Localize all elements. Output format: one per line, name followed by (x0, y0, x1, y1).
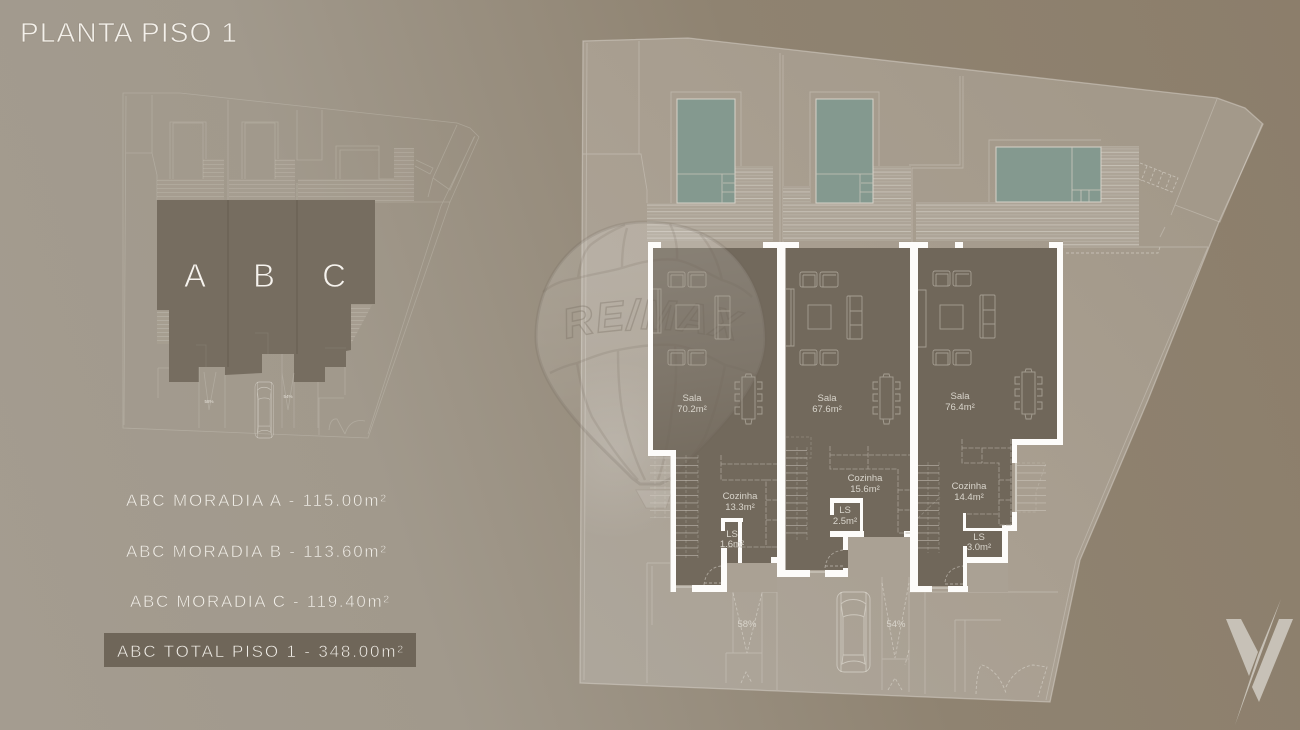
floor B (785, 248, 910, 570)
kitchens (721, 439, 1011, 547)
title: PLANTA PISO 1 (20, 17, 237, 48)
small plan: car and ramps: 54% (283, 394, 293, 399)
label: sala A: 70.2m² (677, 404, 707, 415)
label: sala B: 67.6m² (812, 404, 842, 415)
pool B (816, 99, 873, 203)
area: moradia B: ABC MORADIA B - 113.60m² (126, 542, 386, 561)
main plan: plot glow (584, 360, 714, 540)
small plan: car and ramps: 58% (204, 399, 214, 404)
furniture: house B (786, 272, 900, 424)
label: LS A: LS (726, 529, 738, 540)
kitchen B (830, 446, 910, 533)
area: moradia C: ABC MORADIA C - 119.40m² (130, 592, 389, 611)
room labels (677, 391, 991, 630)
label: sala C: Sala (950, 391, 970, 402)
label: ramp A slope: 58% (737, 619, 757, 630)
kitchen C (962, 439, 1011, 525)
balloon watermark (534, 220, 765, 508)
small plan: lot outline (123, 93, 479, 438)
furniture: house A (653, 272, 762, 424)
label: LS B: 2.5m² (833, 516, 857, 527)
main plan: stairs (650, 437, 1046, 558)
label: cozinha C: Cozinha (952, 481, 987, 492)
letter B: B (253, 257, 275, 294)
floor C (918, 248, 1057, 586)
main plan (534, 37, 1264, 703)
label: LS B: LS (839, 505, 851, 516)
front yard lines (647, 563, 1058, 694)
label: sala A: Sala (682, 393, 702, 404)
walls C (899, 242, 1063, 592)
main plan: decks (647, 146, 1139, 247)
small plan: pools and decks (157, 122, 433, 201)
area: total box (104, 633, 416, 667)
small plan: letters (184, 257, 346, 294)
small plan: car and ramps (158, 354, 365, 438)
label: cozinha A: Cozinha (723, 491, 758, 502)
area: moradia A: ABC MORADIA A - 115.00m² (126, 491, 386, 510)
steps (1139, 163, 1178, 192)
pool A (677, 99, 735, 203)
car (837, 592, 870, 672)
area list (104, 491, 416, 667)
logo: V mark (1226, 599, 1293, 725)
main plan: house floors (653, 248, 1057, 586)
main plan: pools (677, 99, 1101, 203)
walls B (763, 242, 910, 577)
label: sala C: 76.4m² (945, 402, 975, 413)
letter A: A (184, 257, 206, 294)
label: cozinha C: 14.4m² (954, 492, 984, 503)
label: LS C: 3.0m² (967, 542, 991, 553)
furniture: house C (918, 271, 1042, 419)
area: total box: ABC TOTAL PISO 1 - 348.00m² (117, 642, 403, 661)
letter C: C (322, 257, 346, 294)
kitchen A (721, 455, 777, 547)
pool C (996, 147, 1101, 202)
small key plan (123, 93, 479, 438)
small plan: houses A B C block (157, 200, 375, 382)
main plan: lot (580, 38, 1263, 702)
label: ramp B slope: 54% (886, 619, 906, 630)
main plan: site lines (583, 41, 1262, 700)
floor A (653, 248, 777, 585)
label: cozinha A: 13.3m² (725, 502, 755, 513)
main plan: walls (648, 242, 1063, 592)
label: sala B: Sala (817, 393, 837, 404)
walls A (648, 242, 777, 592)
label: LS C: LS (973, 532, 985, 543)
balloon: RE/MAX wordmark: RE/MAX (566, 298, 648, 340)
main plan: entrance patios (727, 537, 1008, 592)
small plan: outdoor stairs (157, 305, 372, 344)
main plan: doors (676, 550, 963, 588)
label: cozinha B: Cozinha (848, 473, 883, 484)
label: cozinha B: 15.6m² (850, 484, 880, 495)
label: LS A: 1.6m² (720, 539, 744, 550)
balloon: basket (636, 490, 672, 508)
